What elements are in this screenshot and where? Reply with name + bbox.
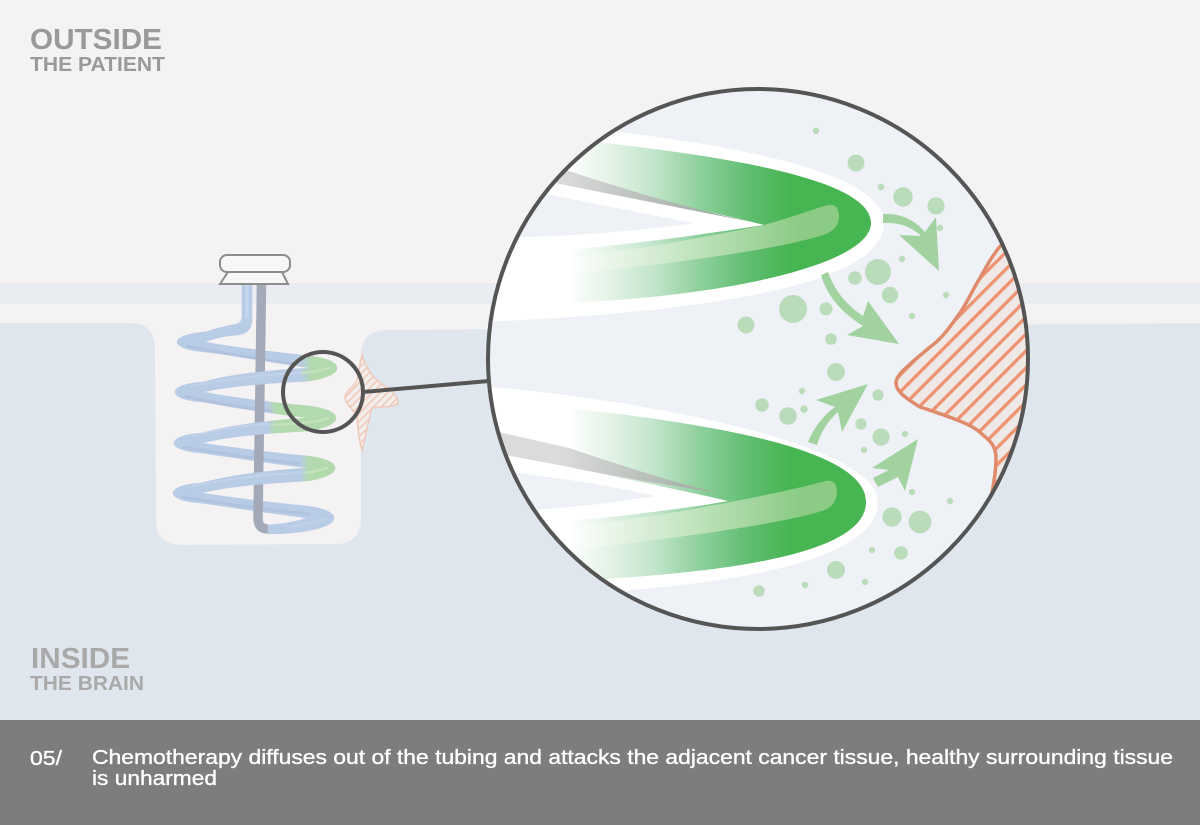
heading: inside: INSIDE xyxy=(31,643,130,675)
heading: outside: OUTSIDE xyxy=(30,24,162,56)
arrow lower left xyxy=(808,384,868,445)
upper tube green xyxy=(569,139,871,303)
back coil strands xyxy=(173,284,337,518)
connector line xyxy=(363,381,489,392)
lens outline xyxy=(488,89,1028,629)
lower tube white wall xyxy=(480,386,878,600)
caption bar xyxy=(0,720,1200,825)
small tumor xyxy=(345,355,398,450)
back strand shading xyxy=(182,346,310,514)
upper tube highlight xyxy=(611,204,839,269)
chemo particles xyxy=(738,128,953,597)
caption text: is unharmed xyxy=(92,767,217,790)
tumor xyxy=(894,244,1026,493)
upper tube white wall xyxy=(480,118,884,322)
caption text xyxy=(92,746,1173,790)
brain tissue with resection cavity xyxy=(0,323,1200,720)
diffusion arrows xyxy=(808,214,939,491)
front strand highlights xyxy=(192,373,326,527)
arrow top right xyxy=(883,214,939,271)
port cap xyxy=(220,255,290,284)
lower tube notch xyxy=(516,472,654,510)
arrow lower right xyxy=(872,439,918,491)
port base xyxy=(220,272,288,284)
tube highlight top xyxy=(246,284,248,318)
heading: inside: THE BRAIN xyxy=(30,673,144,695)
lens background xyxy=(487,88,1029,630)
magnifier circle small xyxy=(283,352,363,432)
step number: 05/ xyxy=(30,747,62,770)
heading: inside xyxy=(30,643,144,695)
rod xyxy=(258,284,268,529)
caption text: Chemotherapy diffuses out of the tubing and attacks the adjacent cancer tissue, healthy surrounding tissue xyxy=(92,746,1173,769)
catheter coil xyxy=(173,284,337,534)
arrow middle xyxy=(821,272,899,344)
lower tube green xyxy=(569,408,866,581)
port top xyxy=(220,255,290,272)
green tip highlights xyxy=(272,368,329,473)
upper gray rod xyxy=(556,170,755,223)
upper tube notch xyxy=(520,194,692,237)
lower tube highlight xyxy=(611,480,837,545)
skin band xyxy=(0,283,1200,304)
magnified view xyxy=(480,88,1040,630)
lower gray rod xyxy=(490,430,721,493)
heading: outside xyxy=(30,24,165,76)
front coil strands xyxy=(173,368,337,534)
heading: outside: THE PATIENT xyxy=(30,54,165,76)
